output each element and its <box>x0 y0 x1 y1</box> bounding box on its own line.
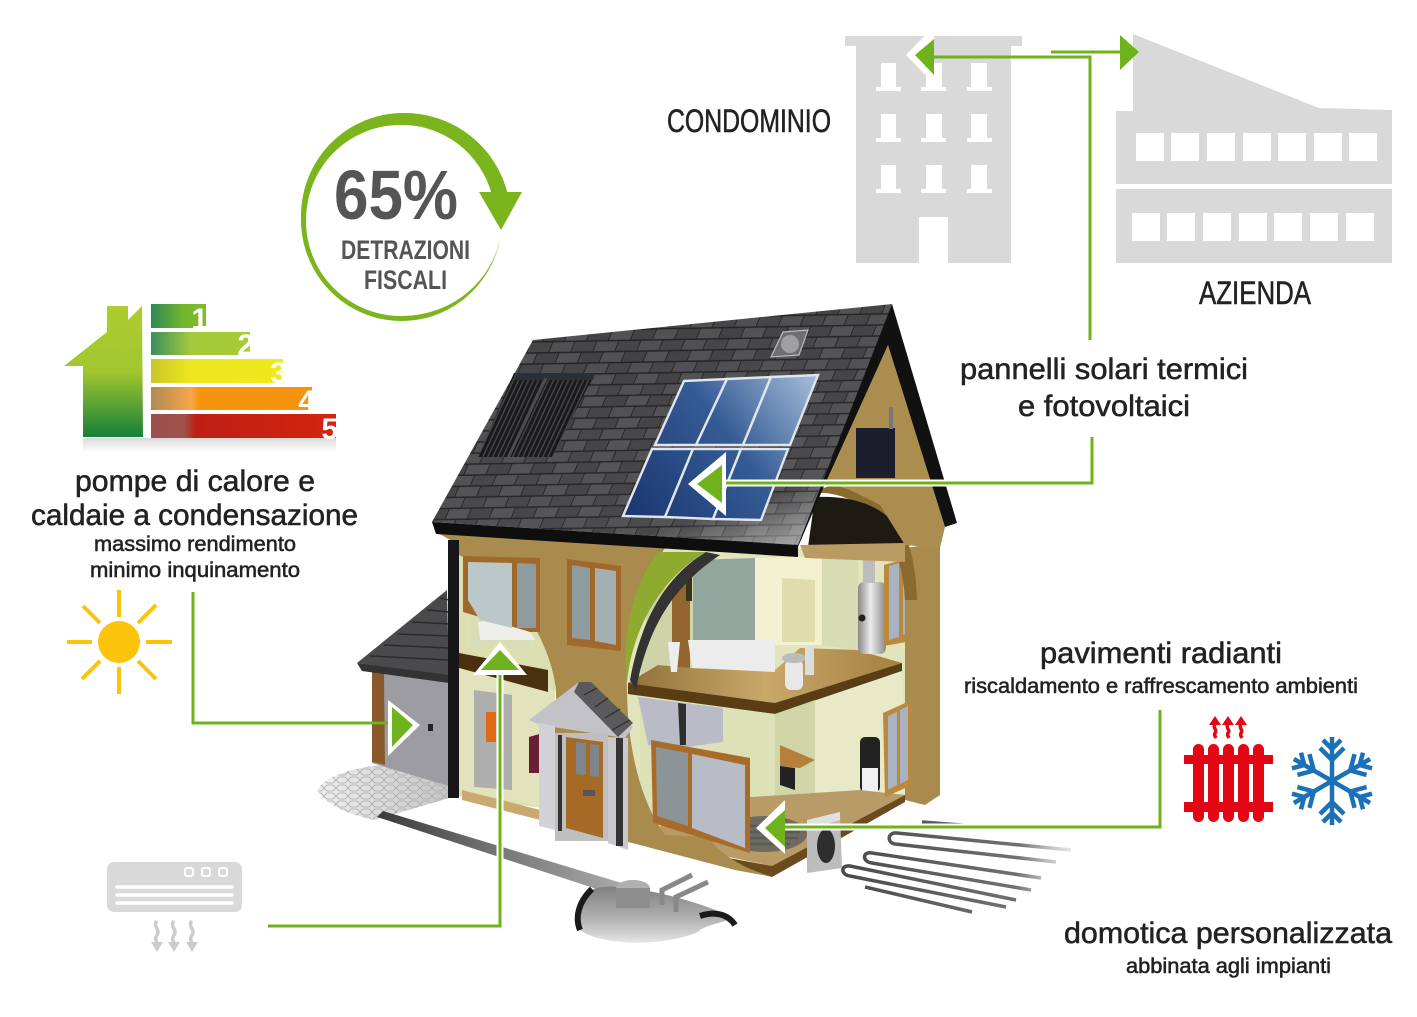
icon: radiator <box>1184 716 1273 822</box>
arrow: from air conditioner <box>268 642 527 926</box>
ground heating loops <box>843 822 1071 912</box>
arched cut over rooms <box>812 478 917 600</box>
heat pumps heading: massimo rendimento <box>94 533 296 556</box>
lower room details <box>638 671 905 850</box>
gable wall <box>825 345 945 548</box>
garage <box>357 590 452 787</box>
reflection <box>83 438 336 452</box>
home automation heading <box>1064 917 1392 978</box>
flue box <box>856 407 895 478</box>
lower floor <box>640 790 905 866</box>
house illustration <box>317 304 1071 943</box>
right side wall <box>905 543 940 805</box>
arrow: to condominio and azienda <box>906 26 1139 340</box>
home automation heading: domotica personalizzata <box>1064 917 1392 950</box>
heat pumps heading <box>31 465 358 582</box>
circular arrow <box>301 113 522 321</box>
energy class numbers: 2 <box>237 329 254 362</box>
badge caption: DETRAZIONI <box>341 235 470 265</box>
radiant floors heading: pavimenti radianti <box>1040 637 1282 670</box>
icon: energy class chart <box>64 303 338 452</box>
toilet <box>782 645 814 690</box>
heat pumps heading: caldaie a condensazione <box>31 499 358 532</box>
front brick wall <box>438 533 773 877</box>
heat pumps heading: minimo inquinamento <box>90 559 300 582</box>
icon: condominio building <box>845 36 1022 263</box>
icon: sun <box>67 590 172 694</box>
solar panels heading <box>960 353 1248 423</box>
energy class numbers: 5 <box>321 413 338 446</box>
upper floor <box>628 648 902 703</box>
radiant floors heading: riscaldamento e raffrescamento ambienti <box>964 675 1358 698</box>
solar thermal collector <box>478 373 595 458</box>
driveway <box>317 765 452 820</box>
bathtub <box>668 640 775 672</box>
front windows <box>463 556 750 853</box>
icon: air conditioner <box>107 862 242 952</box>
label: condominio: CONDOMINIO <box>667 103 831 139</box>
icon: azienda building <box>1116 34 1392 263</box>
energy class numbers <box>191 303 338 446</box>
energy class numbers: 3 <box>270 357 287 390</box>
energy class numbers: 4 <box>298 385 315 418</box>
energy bars <box>151 304 336 438</box>
badge caption: FISCALI <box>364 265 447 295</box>
underground tank <box>578 875 735 943</box>
radiant floors heading <box>964 637 1358 698</box>
slate surface <box>432 304 892 545</box>
percentage: 65% <box>334 156 458 234</box>
icon: snowflake <box>1288 737 1376 825</box>
energy house <box>64 306 143 437</box>
arrow: to garage <box>193 592 420 756</box>
left interior <box>459 552 555 822</box>
arrow: to radiant floor <box>756 710 1160 854</box>
arrow: to solar panels <box>688 437 1092 516</box>
upper room wall details <box>640 555 858 680</box>
entry porch <box>529 682 633 850</box>
roof vent <box>771 330 808 357</box>
solar panels heading: pannelli solari termici <box>960 353 1248 386</box>
heat arrows <box>1209 716 1247 738</box>
bargeboard <box>785 304 957 547</box>
black corner post <box>448 540 459 798</box>
right lower window <box>883 700 912 797</box>
photovoltaic panels <box>623 375 818 520</box>
upper right window <box>884 556 917 646</box>
solar panels heading: e fotovoltaici <box>1018 390 1190 423</box>
outdoor heat pump <box>807 812 842 873</box>
home automation heading: abbinata agli impianti <box>1126 955 1331 978</box>
badge: 65% detrazioni fiscali <box>301 113 522 321</box>
green insulation crescent <box>626 552 706 683</box>
heat pumps heading: pompe di calore e <box>75 465 315 498</box>
badge caption <box>341 235 470 295</box>
hot water boiler <box>858 545 886 654</box>
radiant floor coils <box>723 816 807 852</box>
gutter <box>432 522 798 557</box>
underground pipe <box>377 811 625 896</box>
main roof <box>432 304 957 557</box>
label: azienda: AZIENDA <box>1199 275 1312 311</box>
right interior back <box>627 548 905 877</box>
energy class numbers: 1 <box>191 303 208 336</box>
